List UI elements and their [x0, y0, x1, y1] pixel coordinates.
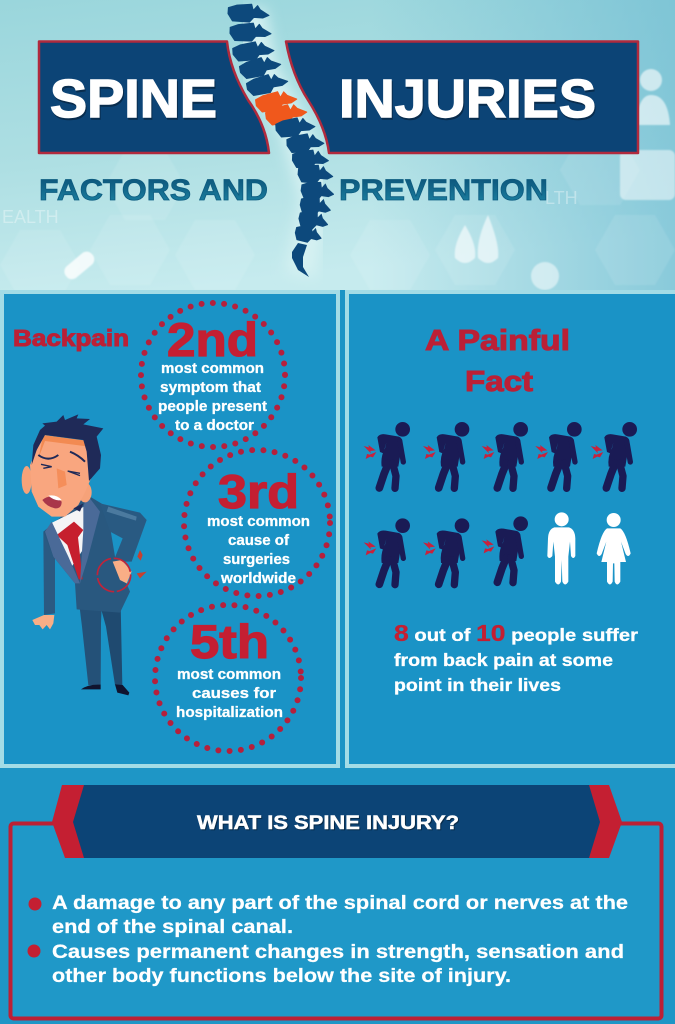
stat circle: 3rd: cause of — [228, 532, 290, 549]
heading: a painful fact — [425, 325, 570, 398]
text: 8 out of 10: point in their lives — [394, 675, 561, 695]
text: 8 out of 10: 8 out of 10 people suffer — [394, 620, 638, 646]
banner: spine title left — [39, 42, 269, 153]
panel: a painful fact — [347, 292, 675, 766]
subtitle: prevention: PREVENTION — [339, 174, 548, 207]
stat circle: 5th: most common — [177, 666, 281, 683]
banner: injuries title right — [286, 42, 638, 153]
stat circle: 5th: 5th — [190, 615, 269, 668]
icon: white woman — [597, 513, 631, 584]
heading: backpain: Backpain — [13, 325, 129, 351]
subtitle: factors and: FACTORS AND — [39, 174, 268, 207]
banner: injuries title right: INJURIES — [339, 69, 596, 129]
stat circle: 2nd — [141, 303, 285, 447]
stat circle: 3rd: surgeries — [223, 551, 290, 568]
banner: what is spine injury — [52, 785, 622, 858]
bullet list: other body functions below the site of injury. — [52, 965, 511, 987]
panel: what is spine injury — [0, 768, 675, 1024]
text: 8 out of 10: from back pain at some — [394, 650, 613, 670]
stat circle: 3rd: most common — [207, 513, 310, 530]
icon: spine — [227, 3, 335, 277]
bullet list: A damage to any part of the spinal cord or nerves at the — [52, 892, 628, 914]
stat circle: 5th: hospitalization — [176, 704, 283, 721]
stat circle: 3rd: worldwide — [220, 570, 296, 587]
bullet marker: second — [28, 944, 40, 958]
heading: a painful fact: Fact — [465, 366, 533, 398]
header background: EALTH — [2, 207, 59, 227]
pictogram: 8 of 10 people — [364, 422, 637, 585]
heading: a painful fact: A Painful — [425, 325, 570, 357]
stat circle: 2nd: most common — [161, 360, 264, 377]
illustration: businessman with back pain — [22, 414, 147, 695]
text: 8 out of 10 — [394, 620, 638, 695]
bullet list: Causes permanent changes in strength, sensation and — [52, 941, 624, 963]
icon: white man — [547, 512, 575, 584]
banner: what is spine injury: WHAT IS SPINE INJURY? — [197, 813, 459, 834]
stat circle: 5th: causes for — [192, 685, 276, 702]
stat circle: 3rd: 3rd — [218, 465, 299, 518]
bullet list: end of the spinal canal. — [52, 916, 293, 938]
stat circle: 5th — [155, 605, 301, 751]
bullet marker: first — [28, 898, 42, 910]
stat circle: 2nd: people present — [158, 398, 267, 415]
panel: backpain — [2, 292, 338, 766]
banner: spine title left: SPINE — [50, 69, 217, 129]
head — [22, 414, 103, 517]
header background — [0, 0, 675, 300]
stat circle: 2nd: 2nd — [167, 313, 258, 366]
stat circle: 3rd — [184, 450, 330, 596]
bullet list — [28, 892, 628, 987]
stat circle: 2nd: symptom that — [160, 379, 261, 396]
stat circle: 2nd: to a doctor — [175, 417, 254, 434]
header background: LTH — [545, 188, 578, 208]
